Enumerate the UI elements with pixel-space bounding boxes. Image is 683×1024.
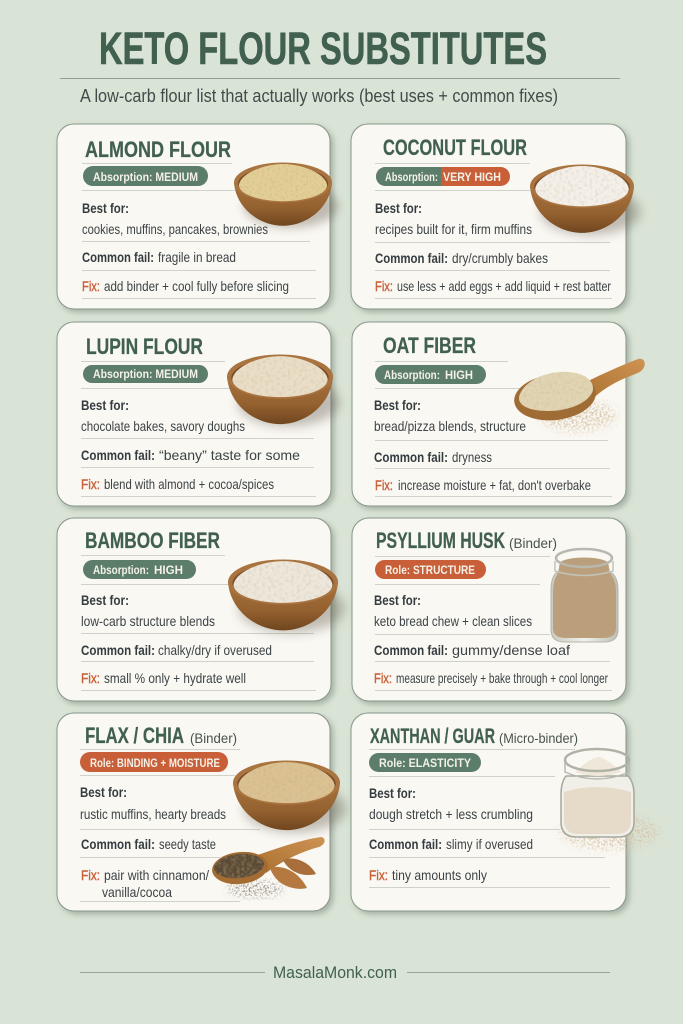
fix: blend with almond + cocoa/spices xyxy=(104,476,274,492)
absorption pill: HIGH xyxy=(154,563,183,577)
panel: bamboo fiber xyxy=(57,518,345,701)
common fail: Common fail: xyxy=(374,643,448,658)
best for: keto bread chew + clean slices xyxy=(374,613,532,629)
icon: xanthan jar xyxy=(560,749,660,849)
best for xyxy=(80,785,226,822)
best for: chocolate bakes, savory doughs xyxy=(81,418,245,434)
fix: use less + add eggs + add liquid + rest batter xyxy=(397,278,611,294)
common fail xyxy=(81,836,216,852)
best for xyxy=(369,786,533,822)
panel: psyllium husk xyxy=(352,518,626,701)
best for: Best for: xyxy=(80,785,127,800)
fix: vanilla/cocoa xyxy=(102,884,172,900)
common fail xyxy=(374,449,492,465)
panel: coconut flour xyxy=(351,124,640,309)
role pill: Role: ELASTICITY xyxy=(379,756,471,770)
absorption pill: HIGH xyxy=(445,368,473,382)
fix: measure precisely + bake through + cool longer xyxy=(396,670,608,686)
heading: coconut flour: COCONUT FLOUR xyxy=(383,135,527,160)
fix: Fix: xyxy=(81,476,100,492)
absorption pill xyxy=(376,167,510,186)
common fail: seedy taste xyxy=(159,836,216,852)
heading: bamboo fiber: BAMBOO FIBER xyxy=(85,528,220,553)
common fail xyxy=(369,836,533,852)
heading: lupin flour: LUPIN FLOUR xyxy=(86,334,203,359)
best for xyxy=(375,201,532,237)
common fail: dryness xyxy=(452,449,492,465)
fix: Fix: xyxy=(375,278,393,294)
common fail: Common fail: xyxy=(375,251,448,266)
common fail: slimy if overused xyxy=(446,836,533,852)
absorption pill xyxy=(83,365,208,383)
common fail: dry/crumbly bakes xyxy=(452,250,548,266)
icon: almond flour bowl xyxy=(234,163,338,228)
fix: pair with cinnamon/ xyxy=(104,867,209,883)
role pill xyxy=(375,560,486,579)
fix: increase moisture + fat, don't overbake xyxy=(398,477,591,493)
common fail: Common fail: xyxy=(81,643,155,658)
common fail: Common fail: xyxy=(369,837,442,852)
common fail: Common fail: xyxy=(82,250,154,265)
role pill xyxy=(80,752,228,772)
icon: psyllium jar xyxy=(551,549,618,642)
common fail xyxy=(81,447,300,463)
best for: cookies, muffins, pancakes, brownies xyxy=(82,221,268,237)
fix: small % only + hydrate well xyxy=(104,670,246,686)
common fail: Common fail: xyxy=(81,448,155,463)
icon: bamboo fiber bowl xyxy=(228,559,345,633)
common fail: “beany” taste for some xyxy=(159,447,300,463)
best for xyxy=(82,201,268,237)
best for xyxy=(374,593,532,629)
fix xyxy=(374,670,608,686)
fix: Fix: xyxy=(375,477,393,493)
common fail xyxy=(374,642,570,658)
panel: flax and chia xyxy=(57,713,346,911)
subtitle: A low-carb flour list that actually works (best uses + common fixes) xyxy=(80,86,558,106)
common fail xyxy=(81,642,272,658)
best for: Best for: xyxy=(369,786,416,801)
common fail: gummy/dense loaf xyxy=(452,642,570,658)
best for: low-carb structure blends xyxy=(81,613,215,629)
fix: Fix: xyxy=(81,867,100,883)
absorption pill: Absorption: xyxy=(93,563,149,577)
common fail: fragile in bread xyxy=(158,249,236,265)
icon: coconut flour bowl xyxy=(530,164,640,235)
best for xyxy=(81,398,245,434)
best for: Best for: xyxy=(374,398,421,413)
absorption pill xyxy=(83,166,208,186)
heading: oat fiber: OAT FIBER xyxy=(383,333,476,358)
common fail xyxy=(375,250,548,266)
fix: add binder + cool fully before slicing xyxy=(104,278,289,294)
common fail: chalky/dry if overused xyxy=(158,642,272,658)
best for: Best for: xyxy=(374,593,421,608)
heading: almond flour: ALMOND FLOUR xyxy=(85,137,231,162)
best for: recipes built for it, firm muffins xyxy=(375,221,532,237)
icon: seed spoon and almonds xyxy=(210,837,325,897)
icon: flax bowl xyxy=(233,760,346,832)
absorption pill: VERY HIGH xyxy=(443,170,501,184)
best for xyxy=(81,593,215,629)
absorption pill xyxy=(83,560,196,579)
absorption pill xyxy=(375,365,486,384)
best for: Best for: xyxy=(375,201,422,216)
heading: xanthan and guar: XANTHAN / GUAR xyxy=(370,725,495,748)
absorption pill: Absorption: xyxy=(384,368,440,382)
role pill: Role: STRUCTURE xyxy=(385,563,475,577)
role pill xyxy=(369,753,481,772)
icon: oat fiber spoon xyxy=(512,359,645,431)
absorption pill: Absorption: xyxy=(385,170,438,184)
panel: almond flour xyxy=(57,124,338,309)
panel: xanthan and guar xyxy=(351,713,660,911)
panel: lupin flour xyxy=(57,322,339,506)
fix: Fix: xyxy=(81,670,100,686)
common fail: Common fail: xyxy=(81,837,155,852)
best for xyxy=(374,398,526,434)
best for: bread/pizza blends, structure xyxy=(374,418,526,434)
panel: oat fiber xyxy=(352,322,645,506)
common fail: Common fail: xyxy=(374,450,448,465)
absorption pill: Absorption: MEDIUM xyxy=(93,170,198,184)
best for: rustic muffins, hearty breads xyxy=(80,806,226,822)
role pill: Role: BINDING + MOISTURE xyxy=(90,756,220,770)
heading: flax and chia: FLAX / CHIA xyxy=(85,723,184,748)
footer: MasalaMonk.com xyxy=(273,964,397,982)
icon: lupin flour bowl xyxy=(227,354,339,426)
fix xyxy=(81,867,209,900)
heading: flax and chia: (Binder) xyxy=(190,730,237,746)
absorption pill: Absorption: MEDIUM xyxy=(93,367,198,381)
fix: Fix: xyxy=(374,670,392,686)
fix: Fix: xyxy=(369,867,388,883)
best for: Best for: xyxy=(82,201,129,216)
common fail xyxy=(82,249,236,265)
fix: Fix: xyxy=(82,278,100,294)
heading: xanthan and guar: (Micro-binder) xyxy=(499,730,578,746)
heading: psyllium husk: PSYLLIUM HUSK xyxy=(376,528,506,553)
heading: psyllium husk: (Binder) xyxy=(509,535,557,551)
fix: tiny amounts only xyxy=(392,867,487,883)
best for: Best for: xyxy=(81,593,129,608)
best for: dough stretch + less crumbling xyxy=(369,806,533,822)
best for: Best for: xyxy=(81,398,129,413)
